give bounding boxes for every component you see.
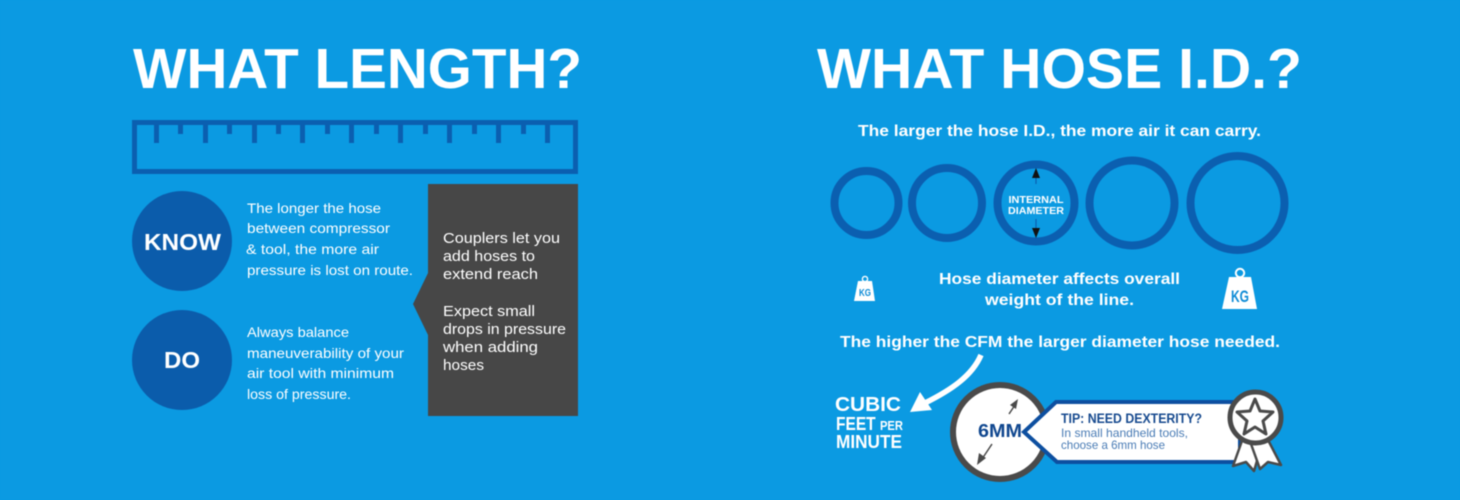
panel: know	[132, 191, 413, 291]
icon: large weight	[1222, 269, 1257, 309]
label: cubic feet per minute: FEET PER	[836, 414, 904, 434]
heading: what hose id: WHAT HOSE I.D.?	[817, 37, 1302, 101]
know badge: KNOW	[144, 229, 221, 255]
know text: The longer the hose	[247, 200, 381, 216]
icon: award rosette	[1230, 392, 1281, 471]
label: internal diameter: DIAMETER	[1008, 206, 1065, 217]
arrow: cfm to label	[910, 355, 981, 412]
callout: tip	[1024, 402, 1240, 462]
know text	[246, 200, 413, 278]
callout: tip: choose a 6mm hose	[1061, 438, 1165, 452]
callout: couplers: add hoses to	[443, 248, 535, 265]
do text: loss of pressure.	[247, 386, 351, 402]
callout: couplers: extend reach	[443, 266, 538, 283]
icon: small weight: KG	[859, 288, 871, 299]
panel: do	[132, 310, 404, 410]
callout: tip: In small handheld tools,	[1061, 426, 1188, 440]
do badge	[132, 310, 232, 410]
label: cubic feet per minute	[835, 394, 904, 452]
label: internal diameter	[1008, 168, 1065, 238]
callout: tip: TIP: NEED DEXTERITY?	[1061, 411, 1202, 426]
do badge: DO	[164, 347, 200, 373]
do text: air tool with minimum	[247, 365, 394, 381]
heading: what length: WHAT LENGTH?	[133, 37, 582, 101]
callout: couplers: drops in pressure	[443, 321, 566, 338]
icon: large weight: KG	[1231, 287, 1249, 306]
do text: Always balance	[247, 324, 349, 340]
callout: couplers: when adding	[442, 339, 538, 356]
callout: couplers	[413, 184, 578, 416]
do text: maneuverability of your	[247, 345, 404, 361]
label: cubic feet per minute: MINUTE	[836, 432, 902, 452]
icon: small weight	[854, 276, 875, 301]
label: cubic feet per minute: CUBIC	[835, 394, 901, 416]
text: hose diameter: Hose diameter affects overall	[939, 271, 1180, 288]
diagram: 6mm hose: 6MM	[978, 421, 1022, 441]
icon: ruler	[132, 120, 578, 174]
know text: & tool, the more air	[246, 241, 379, 257]
diagram: hose rings	[834, 156, 1284, 250]
callout: couplers: hoses	[443, 357, 484, 374]
label: internal diameter: INTERNAL	[1008, 195, 1064, 206]
text: higher cfm: The higher the CFM the larger diameter hose needed.	[840, 334, 1280, 351]
callout: couplers: Expect small	[443, 303, 535, 320]
text: larger hose: The larger the hose I.D., the more air it can carry.	[858, 123, 1261, 140]
callout: couplers: Couplers let you	[443, 230, 560, 247]
do text	[247, 324, 404, 402]
know badge	[132, 191, 232, 291]
text: hose diameter	[939, 271, 1180, 309]
text: hose diameter: weight of the line.	[984, 292, 1134, 309]
know text: between compressor	[247, 220, 390, 236]
diagram: 6mm hose	[953, 385, 1047, 479]
know text: pressure is lost on route.	[247, 262, 413, 278]
